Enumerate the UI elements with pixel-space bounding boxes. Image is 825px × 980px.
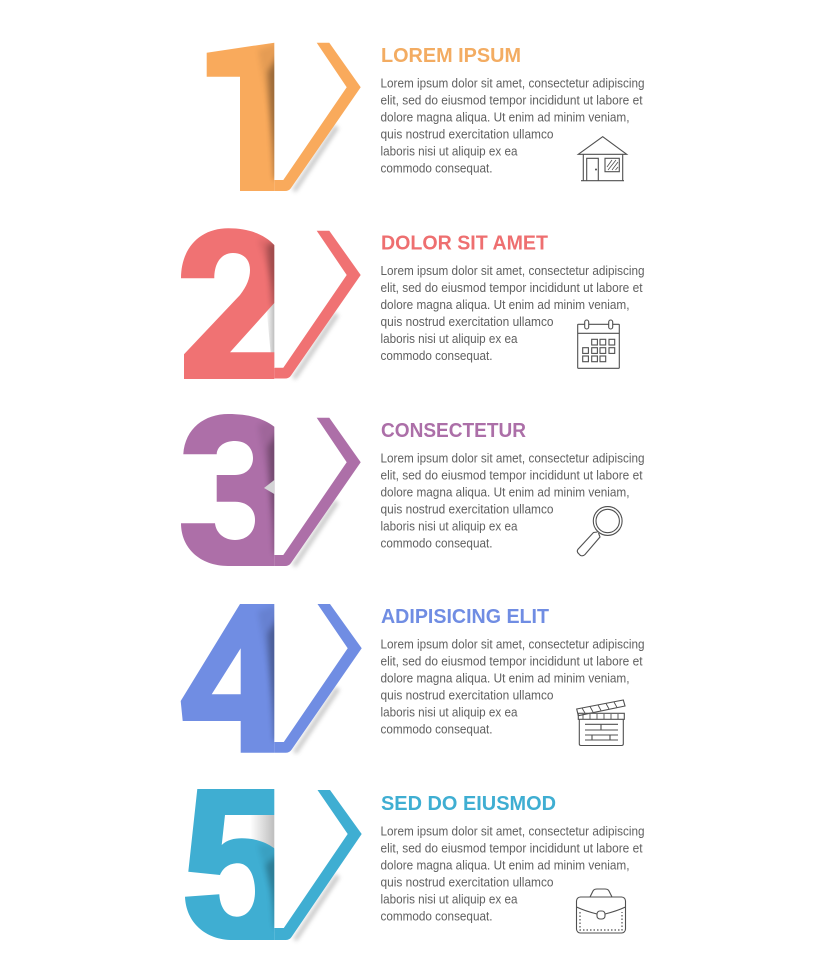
body text: commodo consequat. (380, 162, 492, 176)
panel: step 4 (181, 604, 644, 754)
numeral 4 with folded chevron (181, 604, 362, 754)
body text (380, 264, 644, 363)
body text: quis nostrud exercitation ullamco (380, 502, 554, 516)
numeral 2 with folded chevron (181, 228, 361, 380)
body text (380, 452, 644, 550)
icon: film clapperboard (577, 700, 625, 746)
body text: Lorem ipsum dolor sit amet, consectetur adipiscing (380, 452, 644, 466)
body text: laboris nisi ut aliquip ex ea (380, 332, 518, 346)
body text (380, 76, 644, 176)
body text: elit, sed do eiusmod tempor incididunt ut labore et (380, 842, 643, 856)
body text: elit, sed do eiusmod tempor incididunt ut labore et (380, 654, 643, 668)
body text (380, 824, 644, 924)
body text: dolore magna aliqua. Ut enim ad minim veniam, (380, 672, 630, 686)
body text: dolore magna aliqua. Ut enim ad minim veniam, (380, 486, 630, 500)
heading: DOLOR SIT AMET (381, 232, 548, 254)
body text: laboris nisi ut aliquip ex ea (380, 520, 518, 534)
panel: step 2 (181, 228, 644, 380)
body text: Lorem ipsum dolor sit amet, consectetur adipiscing (380, 824, 644, 838)
numeral 5 with folded chevron (185, 789, 362, 941)
body text: laboris nisi ut aliquip ex ea (380, 892, 518, 906)
icon: house (578, 137, 627, 181)
numeral 3 with folded chevron (181, 414, 361, 567)
body text: commodo consequat. (380, 722, 492, 736)
body text: Lorem ipsum dolor sit amet, consectetur adipiscing (380, 76, 644, 90)
heading: SED DO EIUSMOD (381, 793, 556, 815)
heading: ADIPISICING ELIT (381, 606, 549, 628)
body text: Lorem ipsum dolor sit amet, consectetur adipiscing (380, 264, 644, 278)
icon: calendar (578, 320, 619, 368)
body text: dolore magna aliqua. Ut enim ad minim veniam, (380, 298, 630, 312)
icon: briefcase (576, 889, 626, 933)
body text: quis nostrud exercitation ullamco (380, 315, 554, 329)
heading: CONSECTETUR (381, 420, 527, 442)
numeral 1 with folded chevron (207, 42, 361, 192)
body text: dolore magna aliqua. Ut enim ad minim veniam, (380, 858, 630, 872)
body text (380, 638, 644, 736)
icon: magnifying glass (577, 507, 622, 556)
body text: elit, sed do eiusmod tempor incididunt ut labore et (380, 281, 643, 295)
body text: quis nostrud exercitation ullamco (380, 688, 554, 702)
body text: elit, sed do eiusmod tempor incididunt ut labore et (380, 468, 643, 482)
body text: elit, sed do eiusmod tempor incididunt ut labore et (380, 94, 643, 108)
body text: quis nostrud exercitation ullamco (380, 128, 554, 142)
body text: commodo consequat. (380, 349, 492, 363)
body text: commodo consequat. (380, 536, 492, 550)
body text: commodo consequat. (380, 910, 492, 924)
body text: laboris nisi ut aliquip ex ea (380, 144, 518, 158)
body text: dolore magna aliqua. Ut enim ad minim veniam, (380, 110, 630, 124)
panel: step 1 (207, 42, 644, 192)
panel: step 3 (181, 414, 644, 567)
body text: quis nostrud exercitation ullamco (380, 876, 554, 890)
heading: LOREM IPSUM (381, 45, 521, 67)
body text: laboris nisi ut aliquip ex ea (380, 706, 518, 720)
panel: step 5 (185, 789, 644, 941)
body text: Lorem ipsum dolor sit amet, consectetur adipiscing (380, 638, 644, 652)
